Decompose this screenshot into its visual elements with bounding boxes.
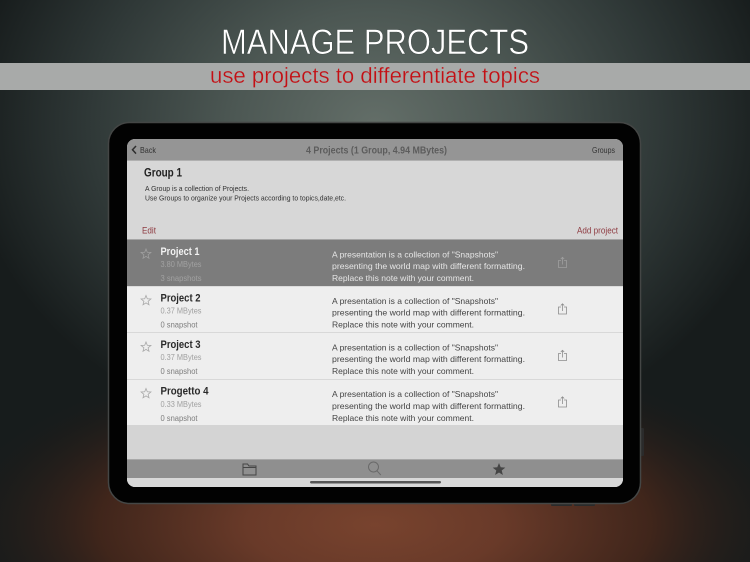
groups button: Groups — [592, 146, 615, 155]
project info: Project 2 — [160, 292, 200, 304]
icon: star — [493, 463, 505, 475]
project info: Project 3 — [160, 339, 200, 351]
project note: presenting the world map with different formatting. — [332, 354, 525, 364]
project note: A presentation is a collection of "Snapshots" — [332, 250, 498, 260]
project info: 0 snapshot — [160, 414, 198, 423]
project info: Project 1 — [160, 246, 200, 258]
share icon — [558, 257, 566, 268]
project row 1 selected — [127, 239, 623, 286]
project info — [160, 339, 202, 376]
project info — [160, 292, 202, 330]
project row 3 — [127, 332, 623, 379]
project info: 0 snapshot — [160, 367, 198, 376]
project info: 0 snapshot — [160, 320, 198, 330]
empty list area — [127, 425, 623, 459]
back button — [132, 146, 157, 155]
tablet side buttons — [551, 428, 644, 506]
project info — [160, 246, 202, 283]
project row 4 — [127, 379, 623, 425]
project note: presenting the world map with different formatting. — [332, 261, 525, 271]
bottom strip — [127, 480, 623, 487]
subtitle: use projects to differentiate topics — [210, 63, 540, 88]
project note — [332, 342, 525, 376]
share icon — [558, 350, 566, 360]
share icon — [558, 397, 566, 407]
navigation bar — [127, 139, 623, 161]
home indicator — [310, 481, 441, 484]
project note — [332, 389, 525, 423]
project note: A presentation is a collection of "Snapshots" — [332, 342, 498, 352]
navigation title: 4 Projects (1 Group, 4.94 MBytes) — [306, 146, 447, 156]
group description: A Group is a collection of Projects. — [145, 184, 249, 193]
group title: Group 1 — [144, 168, 183, 180]
project info — [160, 386, 209, 423]
group description — [145, 186, 346, 202]
star — [141, 388, 151, 398]
project note: presenting the world map with different formatting. — [332, 401, 525, 411]
back button: Back — [140, 146, 157, 155]
project info: 0.37 MBytes — [160, 353, 202, 362]
tablet body — [108, 122, 640, 504]
star — [141, 249, 151, 258]
project info: 3 snapshots — [160, 274, 202, 283]
project note — [332, 250, 525, 283]
tab bar — [127, 459, 623, 478]
subtitle band — [0, 63, 750, 90]
icon: search — [368, 462, 381, 475]
project info: Progetto 4 — [160, 386, 209, 398]
project info: 3.80 MBytes — [160, 260, 202, 269]
project note: A presentation is a collection of "Snapshots" — [332, 296, 498, 306]
project info: 0.33 MBytes — [160, 400, 202, 409]
project note: Replace this note with your comment. — [332, 320, 474, 330]
project info: 0.37 MBytes — [160, 306, 202, 316]
star — [141, 342, 151, 351]
project note: Replace this note with your comment. — [332, 366, 474, 376]
project note: presenting the world map with different formatting. — [332, 308, 525, 318]
edit link: Edit — [142, 226, 157, 236]
title: MANAGE PROJECTS — [221, 23, 529, 62]
project note — [332, 296, 525, 330]
group header — [142, 168, 618, 236]
group description: Use Groups to organize your Projects according to topics,date,etc. — [145, 194, 346, 202]
project note: Replace this note with your comment. — [332, 273, 474, 283]
tablet device — [108, 122, 644, 506]
add project link: Add project — [577, 226, 619, 236]
project note: Replace this note with your comment. — [332, 413, 474, 423]
project note: A presentation is a collection of "Snapshots" — [332, 389, 498, 399]
star — [141, 296, 151, 305]
screen — [127, 139, 623, 487]
icon: folder — [243, 464, 256, 475]
project row 2 — [127, 286, 623, 332]
share icon — [558, 304, 566, 314]
